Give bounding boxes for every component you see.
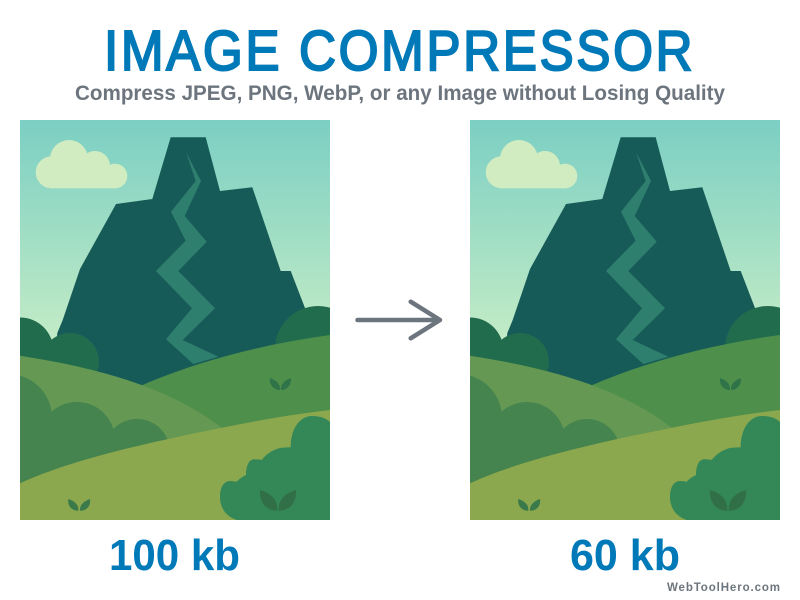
leaves xyxy=(518,378,746,511)
dark bushes xyxy=(0,306,361,392)
image: original landscape xyxy=(20,120,330,520)
right hill xyxy=(140,335,330,520)
label: compressed size: 60 kb xyxy=(570,531,680,580)
cloud xyxy=(36,140,127,188)
cloud xyxy=(486,140,577,188)
title: IMAGE COMPRESSOR xyxy=(104,20,693,83)
mountain xyxy=(500,137,775,420)
leaves xyxy=(68,378,296,511)
front hill xyxy=(20,410,330,520)
sky xyxy=(20,120,330,360)
right hill xyxy=(590,335,780,520)
watermark: WebToolHero.com xyxy=(667,582,780,594)
left hill xyxy=(20,356,222,520)
label: original size: 100 kb xyxy=(109,531,240,580)
mountain crack xyxy=(156,152,218,364)
left hill xyxy=(470,356,672,520)
sky xyxy=(470,120,780,360)
mid bushes xyxy=(0,374,170,500)
front bush xyxy=(670,416,780,520)
dark bushes xyxy=(436,306,800,392)
subtitle: Compress JPEG, PNG, WebP, or any Image without Losing Quality xyxy=(75,82,725,105)
mountain xyxy=(50,137,325,420)
mid bushes xyxy=(414,374,620,500)
front bush xyxy=(220,416,330,520)
image: compressed landscape xyxy=(470,120,780,520)
mountain crack xyxy=(606,152,668,364)
arrow xyxy=(358,302,440,338)
front hill xyxy=(470,410,780,520)
